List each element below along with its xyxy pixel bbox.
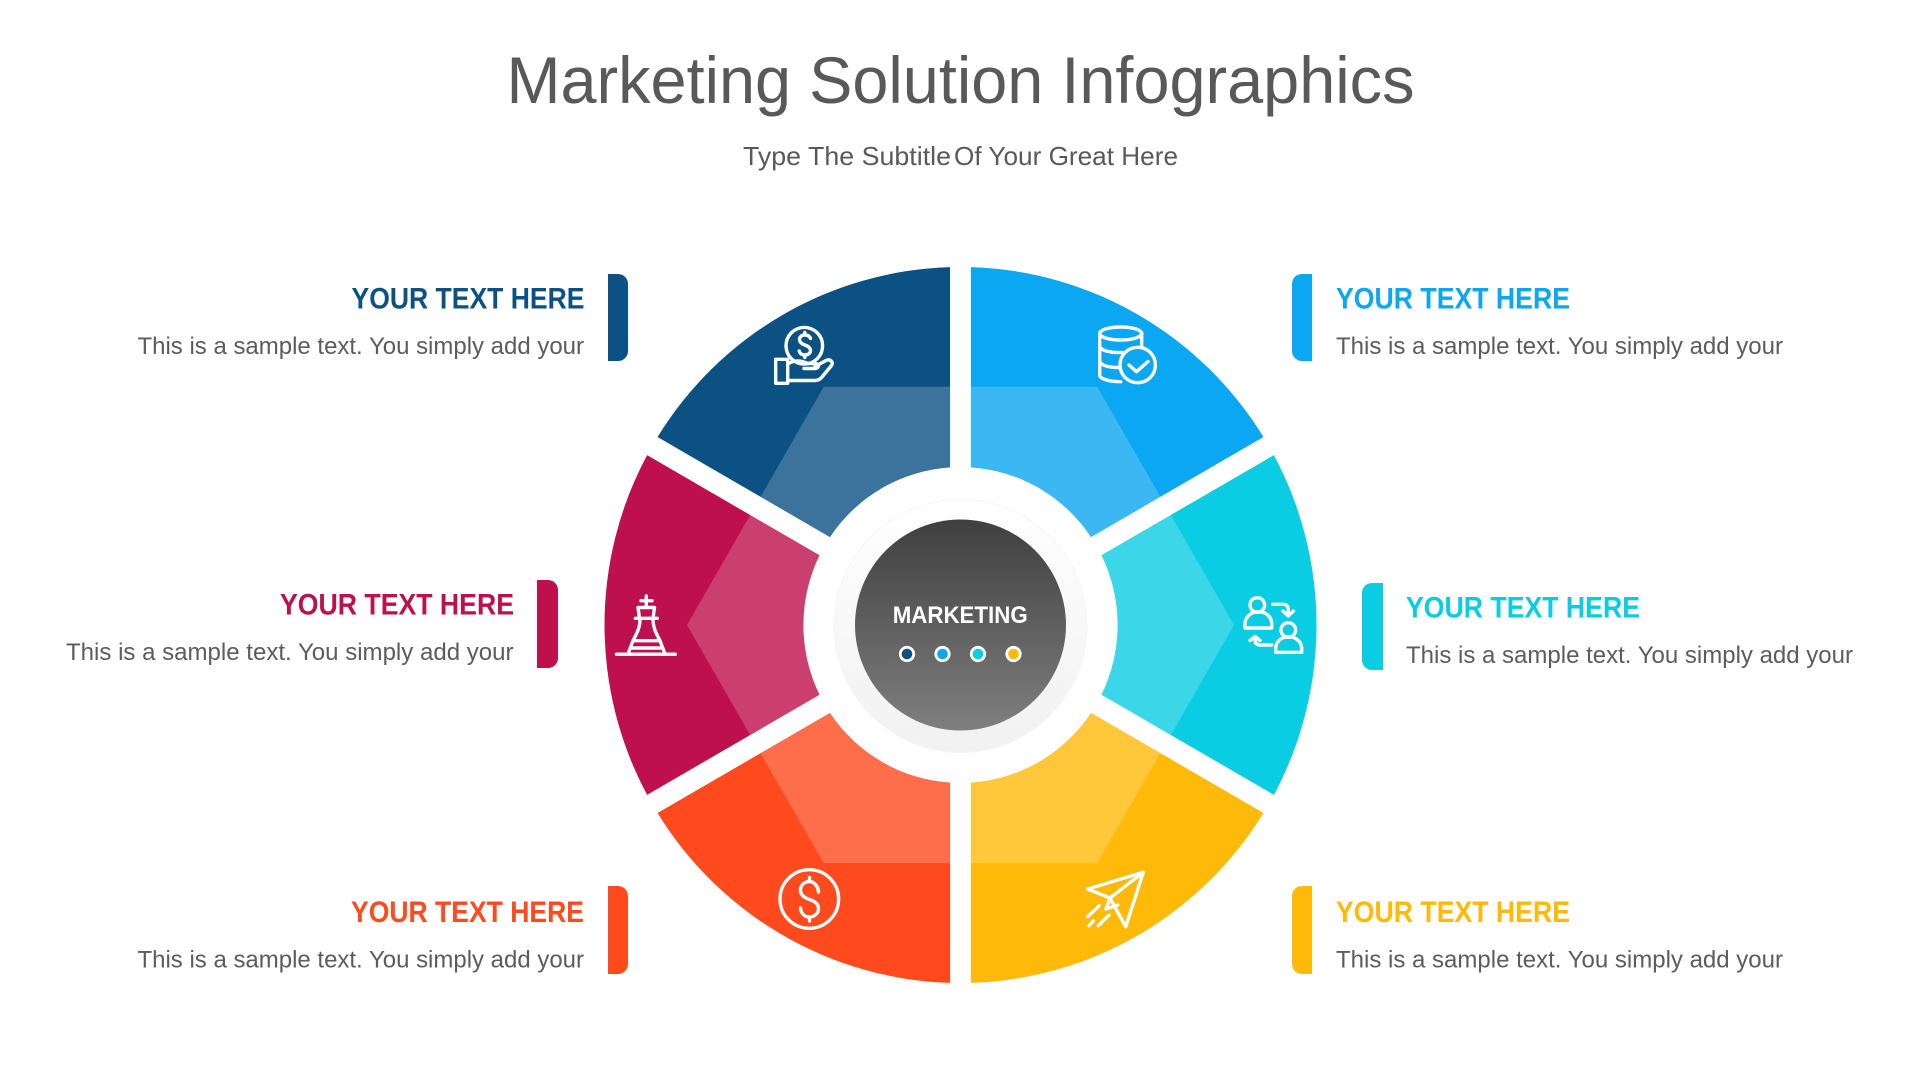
label block: sky blue (1292, 274, 1783, 361)
segment: navy (658, 267, 950, 537)
hub outer ring (834, 500, 1087, 752)
subtitle: Of Your Great Here (954, 141, 1178, 171)
label block: navy (138, 274, 628, 361)
icon: dollar coin (780, 870, 839, 928)
segment: crimson (501, 455, 880, 845)
donut chart (501, 182, 1420, 1068)
subtitle (743, 141, 1178, 171)
subtitle: Type The Subtitle (743, 141, 951, 171)
label block: sky blue: This is a sample text. You simply add your (1336, 333, 1783, 360)
label block: yellow: This is a sample text. You simply add your (1336, 946, 1783, 973)
label block: crimson (66, 580, 558, 668)
label block: cyan (1362, 583, 1853, 670)
label block: orange (138, 886, 628, 974)
center hub (834, 500, 1087, 752)
label block: yellow (1292, 886, 1783, 974)
segment: yellow (971, 713, 1263, 983)
icon: people exchange (1245, 598, 1302, 652)
label block: orange: YOUR TEXT HERE (351, 896, 584, 929)
label block: yellow: YOUR TEXT HERE (1336, 896, 1570, 929)
segment: cyan (1041, 405, 1420, 795)
hub dark circle (855, 520, 1066, 730)
title: Marketing Solution Infographics (506, 43, 1414, 117)
hub dots (900, 647, 1020, 661)
label block: cyan: YOUR TEXT HERE (1406, 592, 1640, 624)
segment: orange (658, 678, 1036, 1068)
label block: crimson: This is a sample text. You simply add your (66, 639, 514, 666)
segment: sky blue (885, 182, 1263, 572)
label block: crimson: YOUR TEXT HERE (280, 588, 514, 622)
label block: navy: This is a sample text. You simply add your (138, 333, 584, 360)
icon: hand holding coin (776, 327, 832, 383)
label block: navy: YOUR TEXT HERE (352, 282, 584, 316)
label block: orange: This is a sample text. You simply add your (138, 946, 584, 973)
label block: cyan: This is a sample text. You simply add your (1406, 642, 1853, 669)
label block: sky blue: YOUR TEXT HERE (1336, 282, 1570, 316)
icon: chess king (616, 596, 675, 654)
hub label: MARKETING (893, 602, 1028, 629)
icon: database check (1100, 327, 1155, 383)
icon: paper plane (1088, 872, 1143, 927)
